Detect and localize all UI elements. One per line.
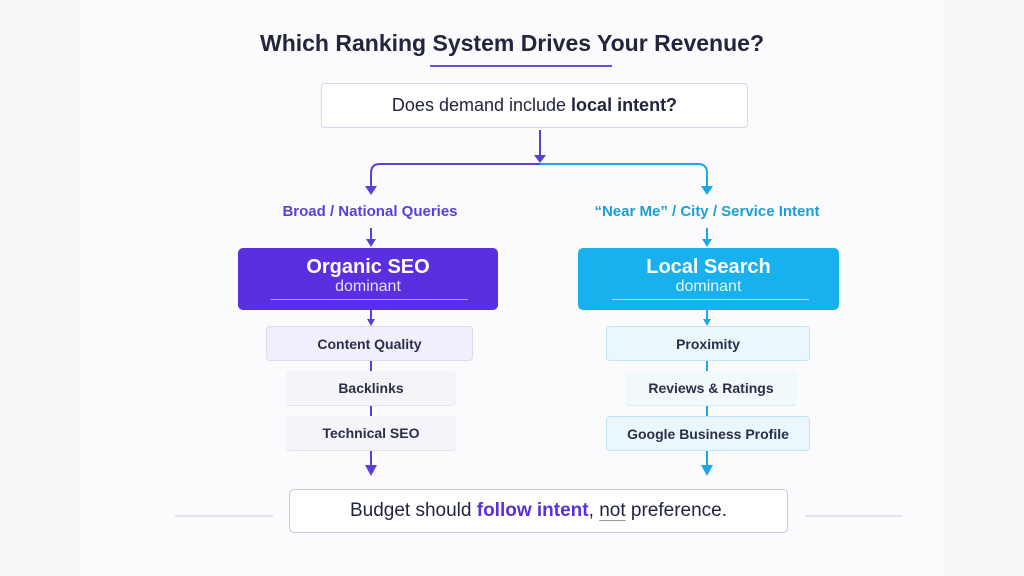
item: backlinks xyxy=(286,371,456,406)
conclusion box: not xyxy=(599,500,626,521)
panel: organic SEO: dominant xyxy=(335,278,401,295)
conclusion box: follow intent xyxy=(477,500,589,521)
item: google business profile xyxy=(606,416,810,451)
item: proximity xyxy=(606,326,810,361)
conclusion box xyxy=(289,489,788,533)
item: proximity: Proximity xyxy=(676,336,740,352)
item: technical SEO xyxy=(286,416,456,451)
label: near me: “Near Me” / City / Service Intent xyxy=(594,203,820,220)
question box: Does demand include xyxy=(392,95,566,115)
title underline xyxy=(430,65,612,67)
item: backlinks: Backlinks xyxy=(338,380,404,396)
panel: local search: dominant xyxy=(676,278,741,295)
conclusion box: Budget should , preference. xyxy=(350,500,727,521)
panel: local search xyxy=(578,248,839,310)
label: broad: Broad / National Queries xyxy=(282,203,458,220)
item: reviews xyxy=(625,371,797,406)
item: content quality: Content Quality xyxy=(317,336,422,352)
item: reviews: Reviews & Ratings xyxy=(648,380,774,396)
item: technical SEO: Technical SEO xyxy=(322,425,420,441)
item: google business profile: Google Business Profile xyxy=(627,426,789,442)
question box: local intent? xyxy=(571,95,677,115)
panel: organic SEO: Organic SEO xyxy=(306,256,430,278)
item: content quality xyxy=(266,326,473,361)
panel: organic SEO xyxy=(238,248,498,310)
title: Which Ranking System Drives Your Revenue? xyxy=(260,30,764,56)
question box xyxy=(321,83,748,128)
panel: local search: Local Search xyxy=(646,256,771,278)
